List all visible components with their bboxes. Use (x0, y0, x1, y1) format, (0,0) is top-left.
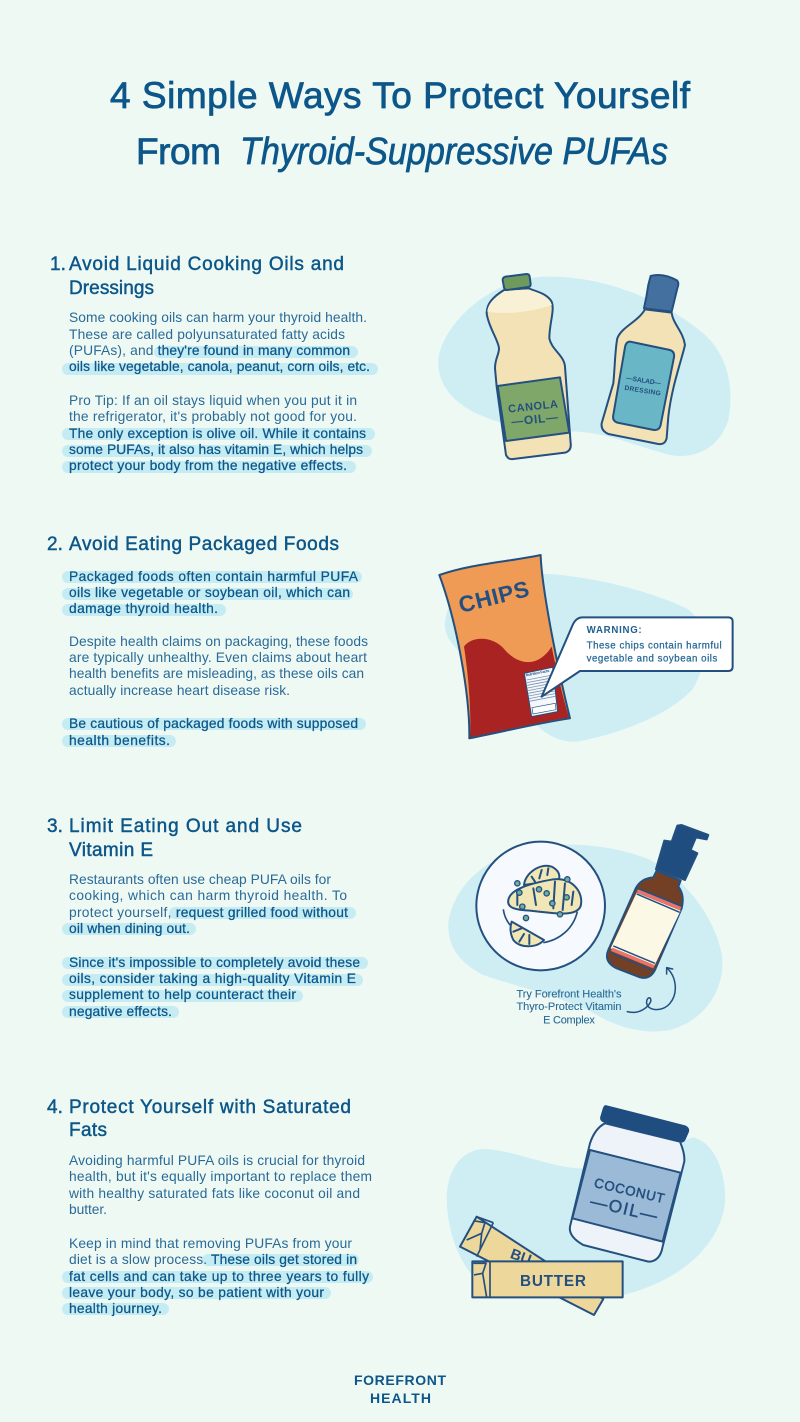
warning callout (542, 617, 733, 697)
heading 1: 1. (50, 254, 66, 275)
warning callout: These chips contain harmful (587, 641, 722, 652)
body text 1: These are called polyunsaturated fatty acids (69, 327, 345, 342)
heading 4: Protect Yourself with Saturated (69, 1097, 351, 1118)
vitamin e note: E Complex (543, 1014, 595, 1026)
front butter stick: BUTTER (520, 1273, 586, 1290)
body text 3: oils, consider taking a high-quality Vitamin E (69, 971, 356, 986)
body text 2: Despite health claims on packaging, these foods (69, 634, 368, 649)
body text 4: butter. (69, 1202, 107, 1217)
body text 4: health, but it's equally important to replace them (69, 1169, 372, 1184)
oil bottle: CANOLA (508, 398, 559, 416)
title: 4 Simple Ways To Protect Yourself (110, 75, 691, 116)
blob 2 (445, 573, 705, 742)
heading 2: 2. (47, 534, 63, 555)
front butter stick (472, 1261, 623, 1297)
section 2: avoid packaged foods (47, 534, 368, 748)
body text 1 (69, 310, 370, 473)
section 1: avoid liquid cooking oils (50, 254, 372, 473)
title: From (136, 131, 221, 172)
body text 3 (69, 872, 360, 1019)
coconut oil jar: —OIL— (588, 1191, 660, 1226)
highlights 2 (68, 577, 360, 741)
body text 4 (68, 1153, 372, 1316)
body text 1: some PUFAs, it also has vitamin E, which helps (69, 442, 363, 457)
logo: FOREFRONT (354, 1372, 446, 1388)
heading 4 (47, 1097, 351, 1141)
logo: HEALTH (370, 1390, 431, 1406)
oil bottle (487, 274, 571, 459)
body text 3: Restaurants often use cheap PUFA oils for (69, 872, 331, 887)
oil bottle: —OIL— (511, 410, 559, 429)
body text 1: The only exception is olive oil. While it contains (69, 426, 366, 441)
body text 3: Since it's impossible to completely avoid these (69, 955, 360, 970)
illustration: grilled food and vitamin e bottle (448, 825, 722, 1031)
heading 1: Dressings (69, 278, 154, 299)
body text 3: cooking, which can harm thyroid health. To (69, 888, 347, 903)
heading 3: Limit Eating Out and Use (69, 816, 302, 837)
heading 4: Fats (69, 1120, 107, 1141)
body text 3: supplement to help counteract their (69, 987, 296, 1002)
curly arrow (627, 968, 675, 1012)
dressing bottle (602, 275, 685, 444)
plate with grilled food (476, 842, 605, 970)
body text 3: protect yourself, request grilled food without (69, 905, 348, 920)
dressing bottle: —SALAD— (626, 375, 662, 387)
body text 2: damage thyroid health. (69, 601, 218, 616)
body text 3: negative effects. (69, 1004, 172, 1019)
highlights 1 (68, 352, 372, 467)
body text 1: Pro Tip: If an oil stays liquid when you put it in (69, 393, 357, 408)
body text 1: protect your body from the negative effects. (69, 458, 347, 473)
body text 3: oil when dining out. (69, 921, 190, 936)
highlights 3 (68, 913, 362, 1012)
logo (354, 1372, 446, 1406)
coconut oil jar: COCONUT (593, 1175, 666, 1206)
illustration: canola oil and salad dressing (438, 274, 731, 459)
heading 1 (50, 254, 344, 299)
body text 2: actually increase heart disease risk. (69, 683, 290, 698)
blob 3 (448, 845, 722, 1031)
body text 4: diet is a slow process. These oils get stored in (69, 1252, 357, 1267)
body text 2: health benefits. (69, 733, 170, 748)
body text 1: the refrigerator, it's probably not good for you. (69, 409, 357, 424)
highlights 4 (68, 1260, 367, 1309)
vitamin e note (516, 988, 622, 1026)
heading 2: Avoid Eating Packaged Foods (69, 534, 339, 555)
back butter stick (460, 1217, 603, 1315)
blob 4 (447, 1137, 725, 1299)
body text 1: (PUFAs), and they're found in many common (69, 343, 350, 358)
body text 2: are typically unhealthy. Even claims about heart (69, 650, 367, 665)
body text 1: Some cooking oils can harm your thyroid health. (69, 310, 367, 325)
nutrition facts label: Nutrition Facts (525, 669, 550, 677)
heading 1: Avoid Liquid Cooking Oils and (69, 254, 344, 275)
body text 2 (69, 569, 368, 748)
vitamin e note: Try Forefront Health's (516, 988, 622, 1000)
body text 1: oils like vegetable, canola, peanut, corn oils, etc. (69, 359, 370, 374)
body text 4: Keep in mind that removing PUFAs from your (69, 1236, 352, 1251)
heading 3: Vitamin E (69, 840, 153, 861)
warning callout: WARNING: (587, 625, 642, 636)
body text 2: Packaged foods often contain harmful PUFA (69, 569, 359, 584)
body text 2: health benefits are misleading, as these oils can (69, 666, 364, 681)
illustration: coconut oil and butter (447, 1106, 725, 1315)
title (110, 75, 691, 173)
vitamin e note: Thyro-Protect Vitamin (516, 1001, 621, 1013)
dressing bottle: DRESSING (624, 385, 661, 397)
title: Thyroid-Suppressive PUFAs (240, 131, 668, 173)
nutrition facts label (524, 667, 558, 717)
chips bag (439, 555, 570, 738)
coconut oil jar (570, 1106, 688, 1262)
body text 4: fat cells and can take up to three years to fully (69, 1269, 369, 1284)
heading 3 (47, 816, 302, 861)
section 3: limit eating out and use vitamin e (47, 816, 362, 1019)
heading 4: 4. (47, 1097, 63, 1118)
heading 3: 3. (47, 816, 63, 837)
body text 4: Avoiding harmful PUFA oils is crucial for thyroid (69, 1153, 365, 1168)
body text 2: oils like vegetable or soybean oil, which can (69, 585, 350, 600)
warning callout: vegetable and soybean oils (587, 653, 717, 664)
section 4: protect yourself with saturated fats (47, 1097, 372, 1316)
body text 4: leave your body, so be patient with your (69, 1285, 324, 1300)
chips bag: CHIPS (456, 575, 532, 618)
illustration: chips bag and warning (439, 555, 733, 742)
back butter stick: BU (508, 1246, 533, 1269)
body text 4: health journey. (69, 1301, 162, 1316)
body text 2: Be cautious of packaged foods with supposed (69, 716, 358, 731)
vitamin e bottle (607, 825, 708, 978)
body text 4: with healthy saturated fats like coconut oil and (68, 1186, 360, 1201)
blob 1 (438, 277, 731, 456)
